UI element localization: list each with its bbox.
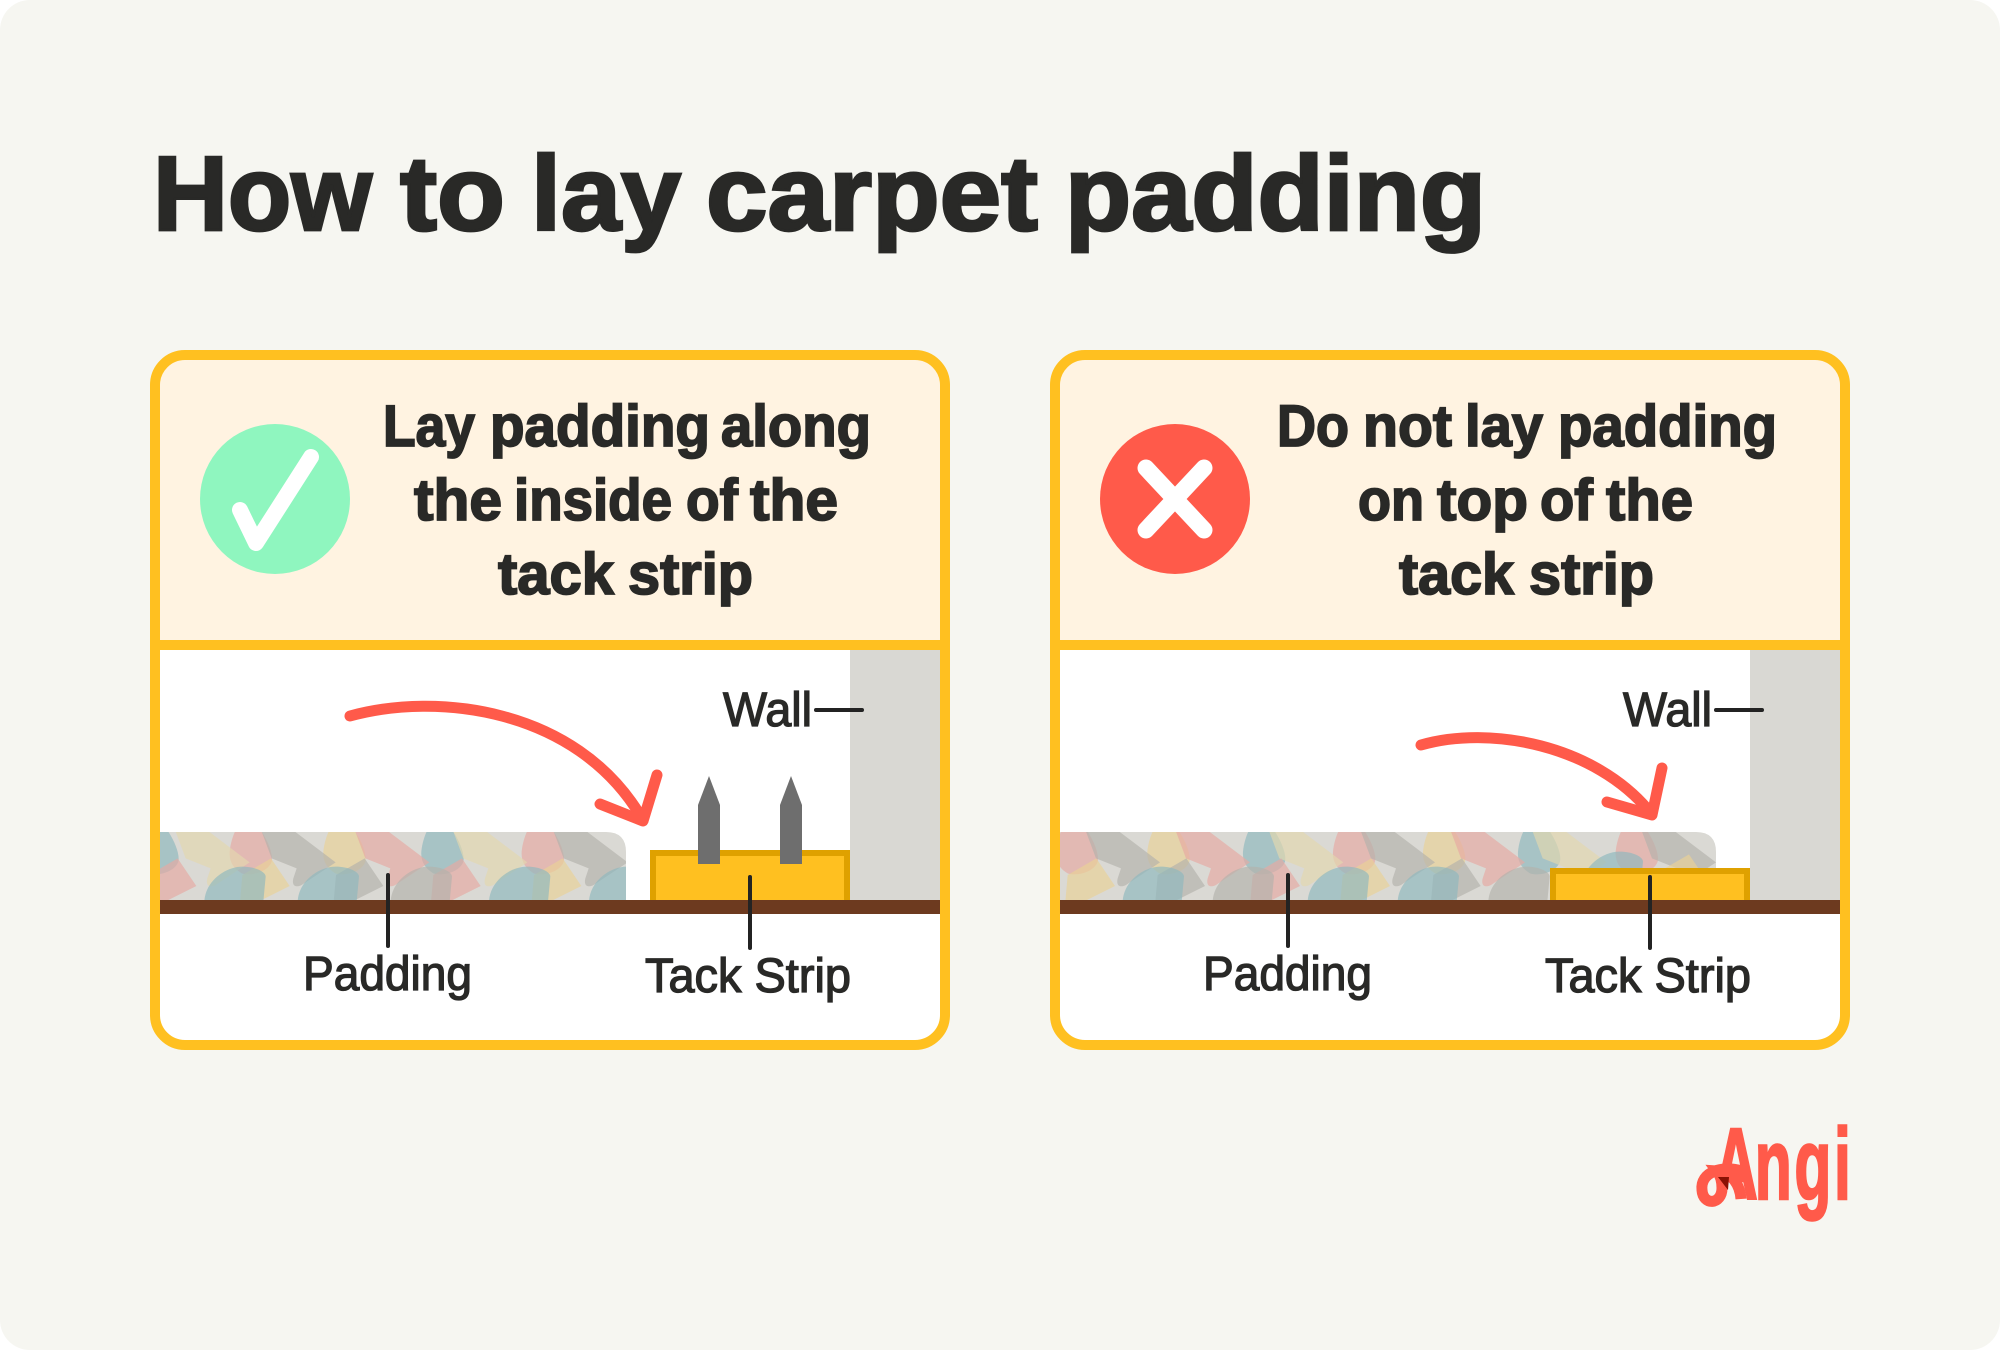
padding bbox=[160, 832, 626, 900]
label: wall: Wall bbox=[723, 684, 812, 737]
heading: incorrect method: the bbox=[1606, 468, 1693, 533]
icon: green check mark bbox=[200, 424, 350, 574]
title: lay bbox=[531, 135, 681, 253]
heading: correct method: along bbox=[721, 394, 871, 459]
floor bbox=[1060, 900, 1840, 914]
heading: correct method bbox=[383, 394, 871, 607]
label: tack strip: Tack Strip bbox=[1545, 950, 1751, 1003]
title: padding bbox=[1065, 135, 1486, 253]
heading: correct method: of bbox=[686, 468, 739, 533]
label: tack strip: Tack Strip bbox=[645, 950, 851, 1003]
heading: incorrect method bbox=[1277, 394, 1777, 607]
heading: incorrect method: padding bbox=[1558, 394, 1777, 459]
tack strip with nails bbox=[653, 776, 847, 903]
icon: red cross bbox=[1100, 424, 1250, 574]
label: wall: Wall bbox=[1623, 684, 1712, 737]
title: How bbox=[153, 135, 373, 253]
wall bbox=[1750, 650, 1840, 900]
panel: incorrect method bbox=[1055, 355, 1845, 1045]
title bbox=[153, 135, 1486, 253]
padding bbox=[1060, 832, 1716, 900]
heading: incorrect method: on bbox=[1358, 468, 1424, 533]
panel frame bbox=[155, 355, 945, 1045]
heading: correct method: padding bbox=[490, 394, 710, 459]
panel: correct method bbox=[136, 355, 945, 1045]
label: wall bbox=[1623, 684, 1762, 737]
label: padding: Padding bbox=[1203, 948, 1372, 1001]
label: padding: Padding bbox=[303, 948, 472, 1001]
title: to bbox=[400, 135, 505, 253]
heading: incorrect method: not bbox=[1363, 394, 1452, 459]
heading: incorrect method: Do bbox=[1277, 394, 1349, 459]
panel frame bbox=[1055, 355, 1845, 1045]
heading: incorrect method: tack bbox=[1399, 542, 1515, 607]
heading: correct method: the bbox=[750, 468, 838, 533]
title: carpet bbox=[706, 135, 1038, 253]
heading: correct method: tack bbox=[498, 542, 615, 607]
logo: Angi: Angi bbox=[1714, 1108, 1851, 1221]
wall bbox=[850, 650, 940, 900]
heading: correct method: Lay bbox=[383, 394, 475, 459]
heading: incorrect method: lay bbox=[1465, 394, 1543, 459]
heading: incorrect method: top bbox=[1437, 468, 1528, 533]
label: wall bbox=[723, 684, 862, 737]
floor bbox=[160, 900, 940, 914]
heading: correct method: strip bbox=[628, 542, 753, 607]
tack strip bbox=[1553, 871, 1747, 903]
heading: incorrect method: of bbox=[1540, 468, 1594, 533]
heading: correct method: the bbox=[414, 468, 502, 533]
arrow: curved red arrow bbox=[350, 706, 657, 821]
heading: correct method: inside bbox=[514, 468, 672, 533]
arrow: curved red arrow bbox=[1421, 738, 1662, 815]
heading: incorrect method: strip bbox=[1529, 542, 1654, 607]
